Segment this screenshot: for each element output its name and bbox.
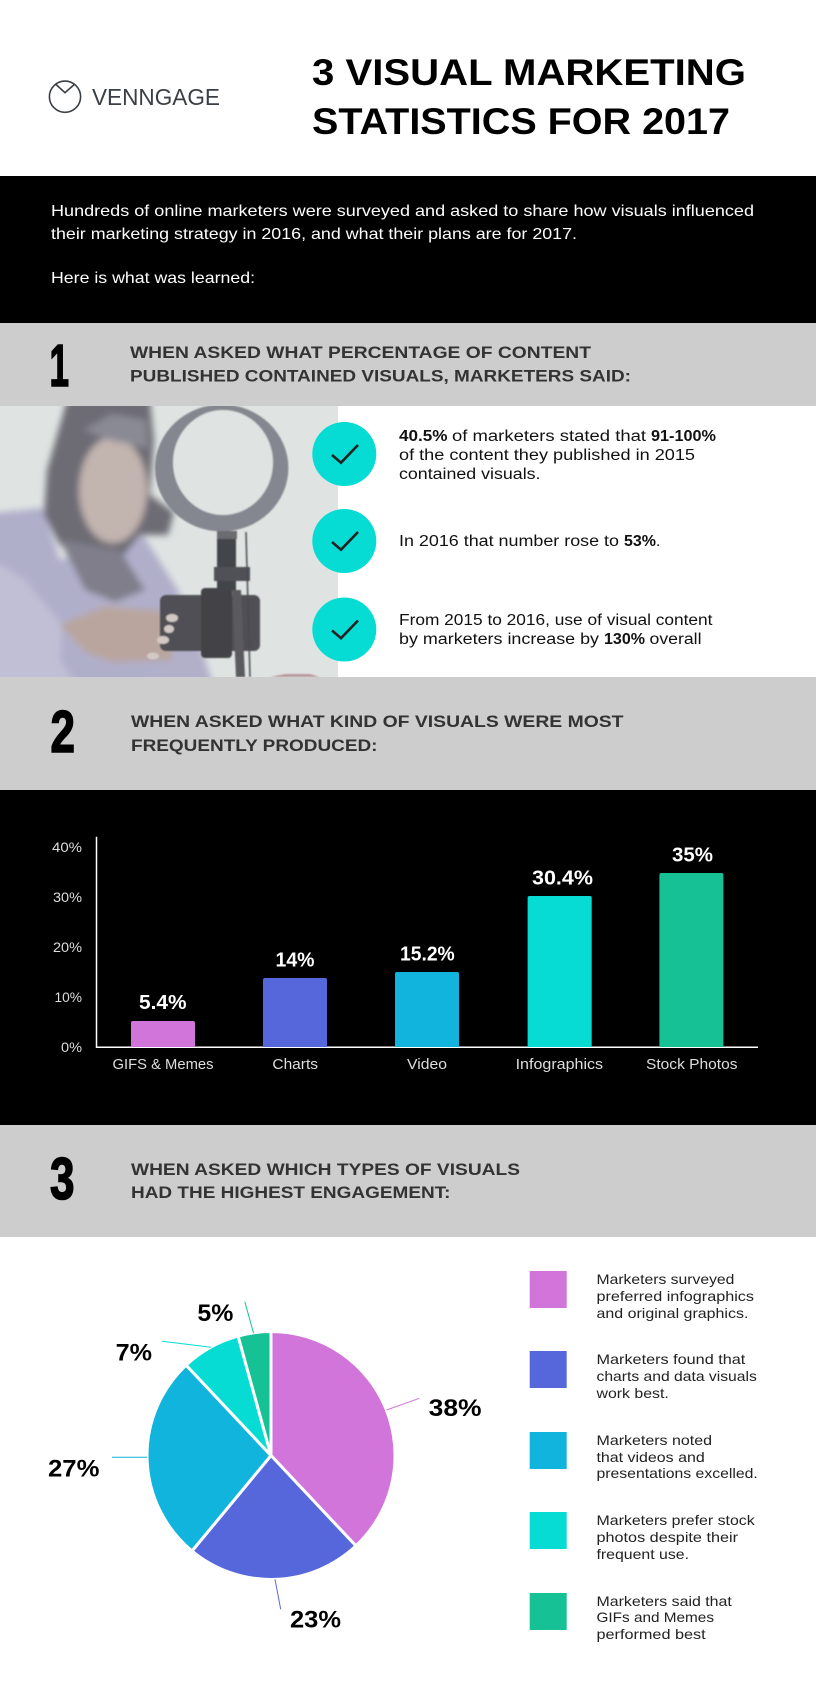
legend item: infographics xyxy=(530,1271,754,1321)
bar: Infographics: Infographics xyxy=(516,1057,603,1073)
panel: intro: Here is what was learned: xyxy=(51,270,255,287)
section 3 header: 3 xyxy=(50,1146,74,1212)
title: 3 VISUAL MARKETING xyxy=(312,52,746,93)
item 1: 40.5% xyxy=(399,428,448,445)
bar: Infographics: 30.4% xyxy=(532,868,593,890)
y axis labels: 10% xyxy=(54,989,82,1005)
y axis labels xyxy=(52,839,82,1055)
bar: Video: Video xyxy=(407,1057,447,1073)
bar: Video: 15.2% xyxy=(400,944,455,966)
photo: woman with ring light xyxy=(0,400,338,690)
bar: GIFS & Memes xyxy=(112,992,214,1073)
section 2 header: 2 xyxy=(50,699,75,765)
bar: Stock Photos: Stock Photos xyxy=(646,1057,738,1073)
item 2: 53% xyxy=(624,533,656,550)
section 1 header: 1 xyxy=(50,333,69,399)
legend xyxy=(530,1271,758,1642)
bar: Video xyxy=(395,944,459,1073)
legend item: videos: presentations excelled. xyxy=(596,1465,758,1481)
callout 7%: 7% xyxy=(116,1340,152,1367)
slice 38% xyxy=(271,1332,395,1546)
legend item: stock photos: frequent use. xyxy=(596,1546,689,1562)
legend item: charts xyxy=(530,1351,757,1401)
y axis labels: 40% xyxy=(52,839,82,855)
bar: GIFS & Memes: 5.4% xyxy=(139,992,187,1014)
item 1: of marketers stated that xyxy=(452,428,647,445)
pie chart xyxy=(48,1300,482,1634)
callout 5%: 5% xyxy=(197,1300,233,1327)
section 2 header: WHEN ASKED WHAT KIND OF VISUALS WERE MOST xyxy=(131,712,624,731)
callout 38%: 38% xyxy=(429,1395,482,1422)
chart axes xyxy=(96,837,758,1047)
legend item: GIFs: performed best xyxy=(596,1626,706,1642)
item 2 xyxy=(312,509,660,573)
logo: Venngage xyxy=(49,81,220,112)
slice 7% xyxy=(186,1336,271,1456)
legend item: GIFs: Marketers said that xyxy=(596,1593,732,1609)
bar: Charts: 14% xyxy=(276,950,315,972)
item 3: by marketers increase by xyxy=(399,631,599,648)
section 3 header xyxy=(0,1125,816,1237)
section 2 header: FREQUENTLY PRODUCED: xyxy=(131,736,378,755)
y axis labels: 0% xyxy=(61,1039,82,1055)
bar: Stock Photos: 35% xyxy=(672,845,713,867)
panel: intro: their marketing strategy in 2016, and what their plans are for 2017. xyxy=(51,226,577,243)
callout 27%: 27% xyxy=(48,1456,100,1483)
legend item: charts: Marketers found that xyxy=(596,1351,745,1367)
item 2: . xyxy=(656,533,660,550)
section 1 header: PUBLISHED CONTAINED VISUALS, MARKETERS SAID: xyxy=(130,366,631,386)
y axis labels: 20% xyxy=(53,939,82,955)
callout 7% xyxy=(116,1340,211,1367)
item 3: overall xyxy=(650,631,702,648)
item 1: of the content they published in 2015 xyxy=(399,447,695,464)
slice 23% xyxy=(192,1456,356,1579)
bar: Infographics xyxy=(516,868,603,1073)
slice 27% xyxy=(147,1365,271,1551)
title xyxy=(312,52,746,142)
panel: intro: Hundreds of online marketers were surveyed and asked to share how visuals influenced xyxy=(51,203,754,220)
item 3 xyxy=(312,598,713,662)
legend item: infographics: and original graphics. xyxy=(596,1305,748,1321)
legend item: charts: charts and data visuals xyxy=(596,1368,757,1384)
legend item: infographics: preferred infographics xyxy=(596,1288,754,1304)
callout 27% xyxy=(48,1456,147,1483)
logo: Venngage: VENNGAGE xyxy=(92,84,220,110)
legend item: videos: that videos and xyxy=(596,1449,705,1465)
item 2: In 2016 that number rose to xyxy=(399,533,619,550)
legend item: charts: work best. xyxy=(595,1385,669,1401)
item 1 xyxy=(312,422,716,486)
bar: Charts xyxy=(263,950,327,1073)
item 3: 130% xyxy=(604,631,645,648)
item 3: From 2015 to 2016, use of visual content xyxy=(399,612,713,629)
panel: bar chart xyxy=(0,790,816,1125)
callout 23% xyxy=(275,1579,341,1634)
bar: GIFS & Memes: GIFS & Memes xyxy=(112,1057,214,1073)
callout 38% xyxy=(386,1395,482,1422)
legend item: stock photos: photos despite their xyxy=(596,1529,738,1545)
legend item: videos xyxy=(530,1432,758,1481)
item 1: 91-100% xyxy=(651,428,716,445)
legend item: infographics: Marketers surveyed xyxy=(596,1271,734,1287)
callout 5% xyxy=(197,1300,254,1333)
legend item: stock photos: Marketers prefer stock xyxy=(596,1512,756,1528)
slice 5% xyxy=(238,1332,271,1456)
section 1 header xyxy=(0,323,816,406)
y axis labels: 30% xyxy=(53,889,82,905)
legend item: videos: Marketers noted xyxy=(596,1432,712,1448)
section 3 header: WHEN ASKED WHICH TYPES OF VISUALS xyxy=(131,1160,520,1179)
title: STATISTICS FOR 2017 xyxy=(312,101,730,142)
legend item: GIFs xyxy=(530,1593,732,1642)
checklist xyxy=(312,422,716,662)
section 3 header: HAD THE HIGHEST ENGAGEMENT: xyxy=(131,1183,450,1202)
legend item: stock photos xyxy=(530,1512,756,1562)
bar: Stock Photos xyxy=(646,845,738,1073)
legend item: GIFs: GIFs and Memes xyxy=(596,1609,714,1625)
panel: intro xyxy=(0,176,816,323)
section 1 header: WHEN ASKED WHAT PERCENTAGE OF CONTENT xyxy=(130,343,592,362)
item 1: contained visuals. xyxy=(399,466,540,483)
bar: Charts: Charts xyxy=(272,1057,318,1073)
callout 23%: 23% xyxy=(290,1607,341,1634)
section 2 header xyxy=(0,677,816,790)
